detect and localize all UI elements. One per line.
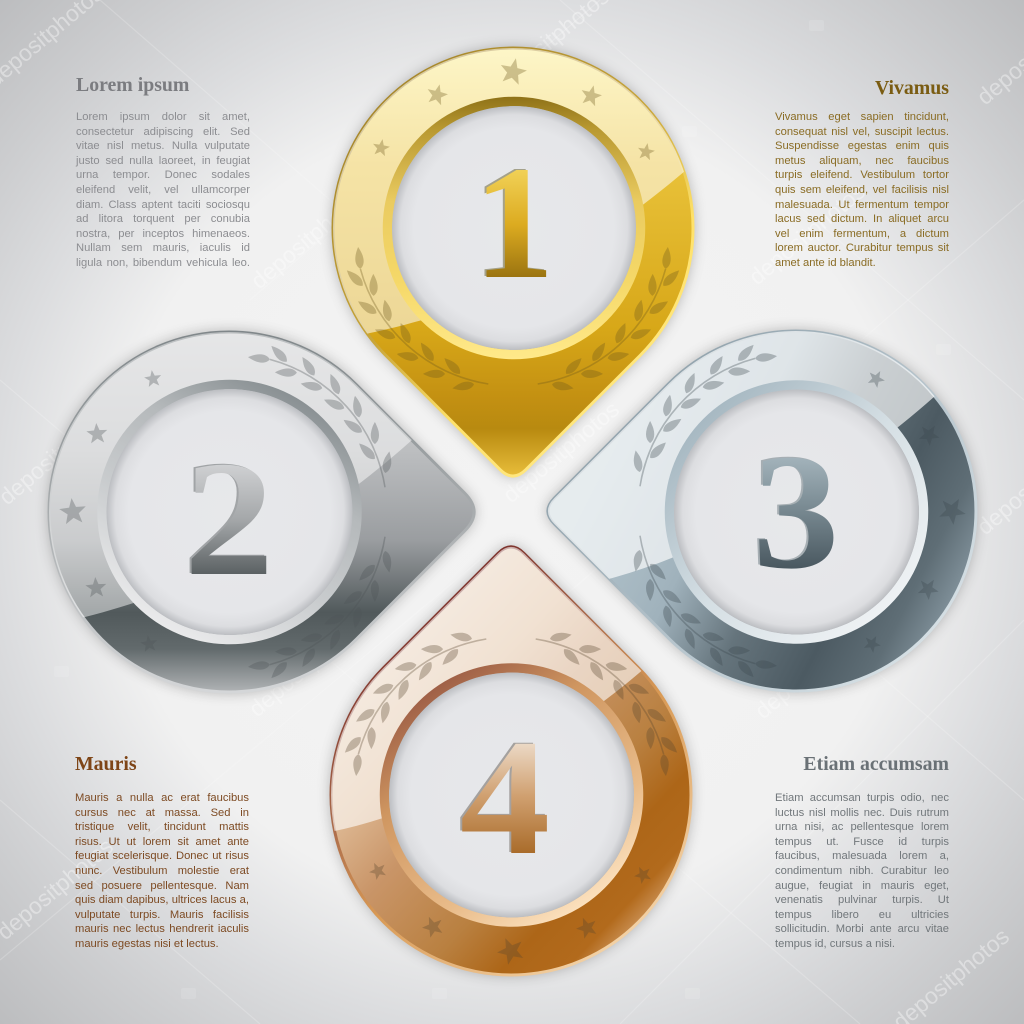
- text block: Etiam accumsam: faucibus, malesuada lorem a,: [775, 850, 949, 862]
- glass highlight: gold: [333, 48, 684, 334]
- window highlight: silver: [30, 300, 490, 625]
- window: bronze: [389, 672, 634, 918]
- text block: Vivamus: quis sem eleifend, vel facilisis nisl: [775, 184, 949, 196]
- text block: Mauris: Mauris a nulla ac erat faucibus: [75, 792, 249, 804]
- text block: Vivamus: Vivamus eget sapien tincidunt,: [775, 111, 949, 123]
- text block: Lorem ipsum: urna tempor. Donec sodales: [76, 169, 250, 181]
- window: blue steel: [674, 390, 919, 634]
- text block: Vivamus: Suspendisse egestas enim quis: [775, 140, 949, 152]
- text block: Vivamus: malesuada. Ut fermentum tempor: [775, 199, 949, 211]
- window highlight: blue steel: [530, 300, 980, 600]
- text block: Mauris: nunc. Vestibulum molestie erat: [75, 865, 249, 877]
- text block: Etiam accumsam: sollicitudin. Morbi ante arcu vitae: [775, 923, 949, 935]
- text block: Lorem ipsum: consectetur adipiscing elit. Sed: [76, 126, 250, 138]
- heading: Mauris: Mauris: [75, 753, 137, 775]
- text block: Mauris: mauris egestas nisi et lectus.: [75, 938, 219, 950]
- laurels and stars: silver: [57, 343, 393, 681]
- text block: Lorem ipsum: vitae nisl metus. Nulla vulputate: [76, 140, 250, 152]
- panel: gold pin 1: [320, 30, 710, 476]
- ring: silver: [102, 384, 357, 640]
- number 2: 2: [182, 427, 272, 609]
- number 4: 4: [460, 705, 550, 889]
- text block: Etiam accumsam: [775, 753, 949, 950]
- text block: Mauris: tristique velit, tincidunt mattis: [75, 821, 249, 833]
- text block: Mauris: quis diam dapibus, ultrices lacus a,: [75, 894, 249, 906]
- text block: Lorem ipsum: Lorem ipsum dolor sit amet,: [76, 111, 250, 123]
- ring: bronze: [384, 668, 638, 922]
- laurels and stars: bronze: [342, 631, 680, 967]
- text block: Vivamus: lorem auctor. Curabitur tempus sit: [775, 242, 949, 254]
- window: silver: [106, 389, 352, 635]
- number 1: 1: [474, 134, 554, 313]
- window: gold: [392, 106, 636, 350]
- text block: Etiam accumsam: venenatis pulvinar turpis. Ut: [775, 894, 949, 906]
- number 3: 3: [751, 419, 837, 602]
- watermark: depositphotos: [744, 178, 870, 290]
- text block: Etiam accumsam: luctus nisl mollis nec. Duis rutrum: [775, 807, 949, 819]
- watermark: depositphotos: [246, 182, 372, 294]
- text block: Mauris: feugiat scelerisque. Donec ut risus: [75, 850, 249, 862]
- text block: Vivamus: vel enim fermentum, a dictum: [775, 228, 949, 240]
- text block: Mauris: sed posuere pellentesque. Nam: [75, 880, 249, 892]
- text block: Etiam accumsam: augue, feugiat in mauris eget,: [775, 880, 949, 892]
- text block: Etiam accumsam: tempus libero eu ultricies: [775, 909, 949, 921]
- text block: Vivamus: lacus sed dictum. In aliquet arcu: [775, 213, 949, 225]
- text block: Lorem ipsum: nostra, per inceptos himenaeos.: [76, 228, 250, 240]
- number 3: 3: [753, 420, 839, 603]
- panel: silver pin 2: [30, 300, 490, 692]
- heading: Lorem ipsum: Lorem ipsum: [76, 74, 189, 96]
- ring: blue steel: [670, 385, 924, 639]
- panel: blue steel pin 3: [530, 300, 980, 691]
- text block: Etiam accumsam: urna nisi, ac pellentesque lorem: [775, 821, 949, 833]
- text block: Etiam accumsam: tempus id, cursus a nisi.: [775, 938, 895, 950]
- text block: Vivamus: amet ante id blandit.: [775, 257, 876, 269]
- text block: Lorem ipsum: justo sed nulla laoreet, in feugiat: [76, 155, 250, 167]
- watermark: depositphotos: [244, 610, 370, 722]
- text block: Lorem ipsum: Nullam sem mauris, iaculis id: [76, 242, 250, 254]
- panel: bronze pin 4: [320, 530, 700, 975]
- text block: Lorem ipsum: ad litora torquent per conubia: [76, 213, 250, 225]
- ring: gold: [388, 102, 640, 354]
- glass highlight: bronze: [331, 546, 642, 831]
- text block: Mauris: cursus nec at massa. Sed in: [75, 807, 249, 819]
- heading: Vivamus: Vivamus: [875, 77, 949, 99]
- text block: Etiam accumsam: tempus ut. Fusce id turpis: [775, 836, 949, 848]
- glass highlight: blue steel: [548, 331, 934, 579]
- window highlight: gold: [320, 30, 710, 345]
- text block: Lorem ipsum: eleifend velit, vel ullamcorper: [76, 184, 250, 196]
- glass highlight: silver: [49, 332, 412, 618]
- window highlight: bronze: [320, 530, 700, 832]
- number 2: 2: [184, 428, 274, 610]
- number 1: 1: [472, 133, 552, 312]
- text block: Mauris: mauris nec lectus hendrerit iaculis: [75, 923, 249, 935]
- laurels and stars: blue steel: [632, 342, 968, 680]
- text block: Etiam accumsam: condimentum nibh. Curabitur leo: [775, 865, 949, 877]
- text block: Lorem ipsum: diam. Class aptent taciti sociosqu: [76, 199, 250, 211]
- text block: Lorem ipsum: [76, 74, 250, 269]
- text block: Lorem ipsum: ligula non, bibendum vehicula leo.: [76, 257, 250, 269]
- text block: Mauris: risus. Ut ut lorem sit amet ante: [75, 836, 249, 848]
- text block: Etiam accumsam: Etiam accumsan turpis odio, nec: [775, 792, 949, 804]
- text block: Vivamus: [775, 77, 949, 269]
- text block: Vivamus: metus aliquam, nec faucibus: [775, 155, 949, 167]
- laurels and stars: gold: [344, 56, 682, 392]
- text block: Mauris: [75, 753, 249, 950]
- text block: Vivamus: consequat nisl vel, suscipit lectus.: [775, 126, 949, 138]
- watermark: depositphotos: [750, 612, 876, 724]
- watermark: depositphotos: [498, 820, 624, 932]
- watermark: depositphotos: [498, 396, 624, 508]
- number 4: 4: [458, 704, 548, 888]
- heading: Etiam accumsam: Etiam accumsam: [803, 753, 949, 775]
- text block: Mauris: vulputate turpis. Mauris facilisis: [75, 909, 249, 921]
- text block: Vivamus: turpis eleifend. Vestibulum tortor: [775, 169, 949, 181]
